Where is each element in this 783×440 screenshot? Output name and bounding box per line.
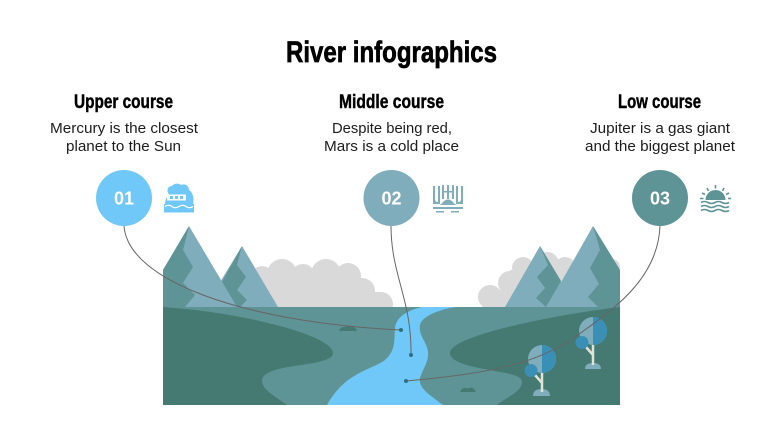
text: upper course description: Mercury is the closest — [50, 121, 198, 137]
badge 02: 02 — [381, 188, 402, 208]
right dark bank — [450, 307, 620, 405]
icon: wave — [164, 184, 194, 212]
tree front — [524, 345, 556, 396]
badge 02 — [364, 170, 420, 226]
icon: sunset over water — [700, 185, 731, 212]
right big mountain — [547, 226, 620, 307]
heading: middle course: Middle course — [339, 92, 444, 113]
text: low course description: Jupiter is a gas giant — [590, 121, 730, 137]
bush left — [339, 326, 357, 331]
river — [327, 307, 457, 405]
tree back — [576, 317, 607, 369]
icon: waterfall — [433, 185, 463, 212]
connector line 02 — [391, 226, 413, 357]
left small mountain — [205, 246, 278, 307]
badge 03 — [632, 170, 688, 226]
title: River infographics — [286, 36, 497, 69]
badge 01: 01 — [114, 188, 134, 208]
right cloud — [478, 252, 620, 309]
text: middle course description: Mars is a cold place — [324, 139, 459, 155]
column: low course — [585, 92, 735, 155]
column: middle course — [324, 92, 459, 155]
ground — [163, 307, 620, 405]
bush right — [460, 388, 476, 392]
left dark bank — [163, 307, 333, 405]
text: upper course description: planet to the Sun — [66, 139, 181, 155]
column: upper course — [50, 92, 198, 155]
landscape illustration — [163, 226, 620, 405]
right small mountain — [505, 246, 576, 307]
connector line 03 — [404, 226, 660, 383]
left big mountain — [163, 226, 237, 307]
heading: upper course: Upper course — [74, 92, 173, 113]
left cloud — [250, 259, 393, 316]
connector line 01 — [124, 226, 403, 332]
badge 01 — [96, 170, 152, 226]
text: middle course description: Despite being red, — [332, 121, 452, 137]
heading: low course: Low course — [618, 92, 701, 113]
text: low course description: and the biggest planet — [585, 139, 735, 155]
badge 03: 03 — [650, 188, 670, 208]
